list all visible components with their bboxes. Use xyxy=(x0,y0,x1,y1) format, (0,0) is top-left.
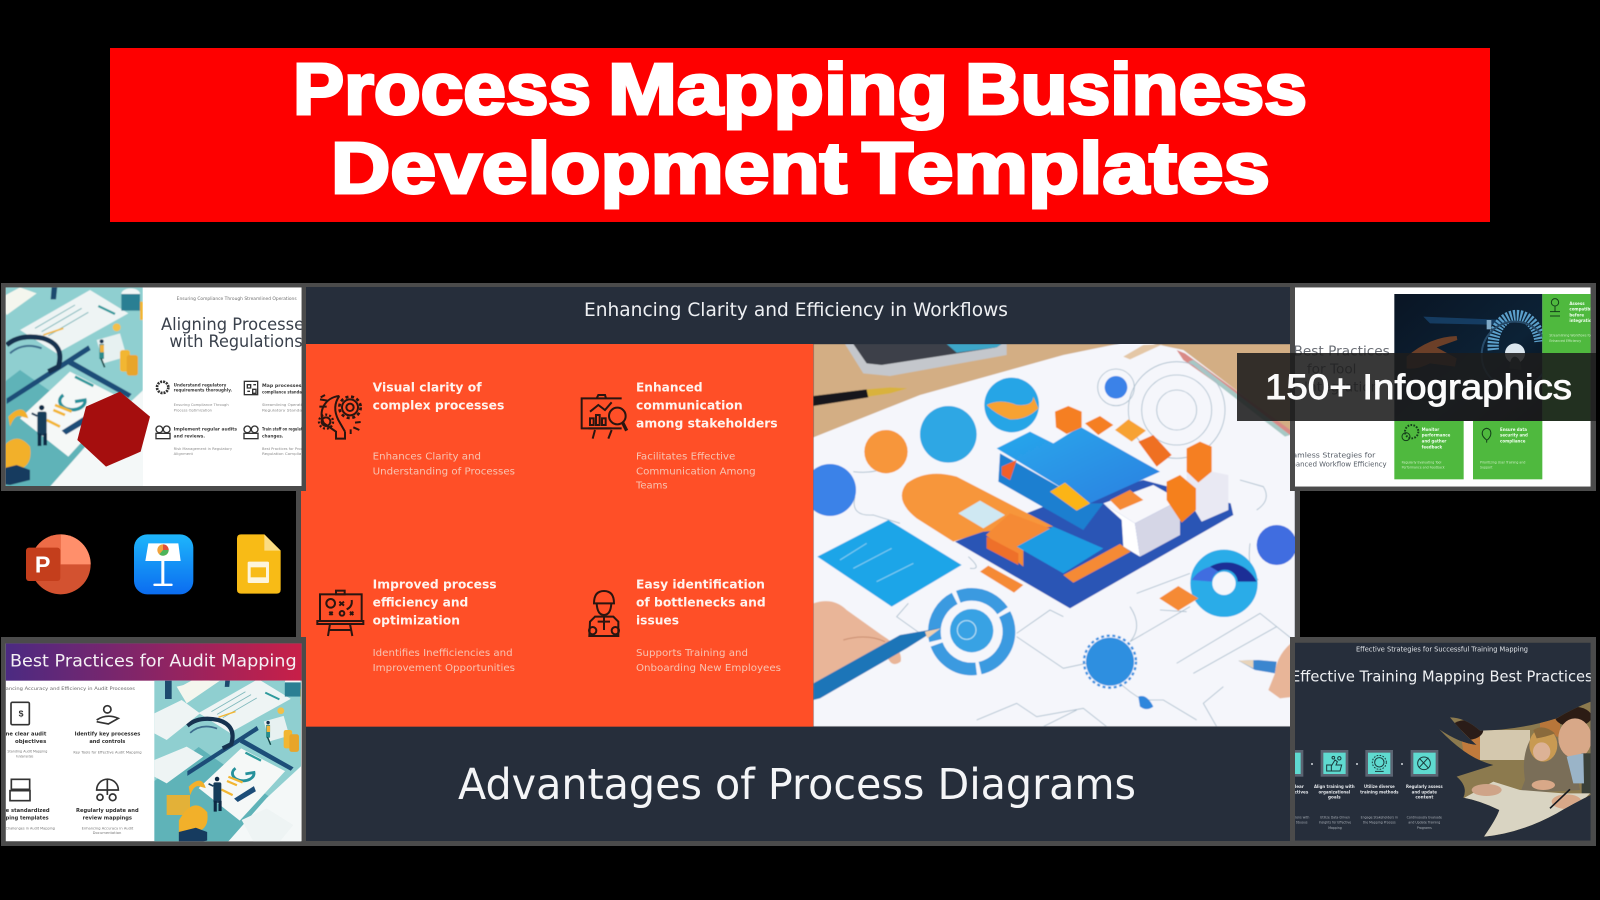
icon: lightbulb with gears xyxy=(319,395,361,439)
thumbnail items: changes. xyxy=(262,433,284,439)
benefit 3: Identifies Inefficiencies and xyxy=(373,648,513,659)
thumbnail green panels: security and xyxy=(1500,433,1528,438)
thumbnail subheading: Seamless Strategies for xyxy=(1283,451,1375,459)
thumbnail items: Train staff on regulatory xyxy=(262,427,309,433)
slide thumbnail: audit mapping: Regularly update and xyxy=(76,808,139,814)
thumbnail heading: Aligning Processes xyxy=(161,315,313,334)
thumbnail items: Process Optimization xyxy=(174,408,212,412)
training steps: Mapping xyxy=(1328,826,1342,830)
slide thumbnail: audit mapping: Key Tools for Effective Audit Mapping xyxy=(73,750,142,754)
slide thumbnail: training mapping xyxy=(1287,637,1596,846)
training steps: Programs xyxy=(1417,826,1432,830)
slide thumbnail: audit mapping xyxy=(1,637,306,846)
training steps: Regularly assess xyxy=(1406,784,1443,789)
training steps: tibuous xyxy=(1296,821,1308,825)
benefit 2: Teams xyxy=(635,480,668,491)
benefit 3: optimization xyxy=(373,613,460,627)
benefit 1 xyxy=(373,381,515,477)
thumbnail items: Risk Management in Regulatory xyxy=(174,447,233,451)
illustration: isometric process diagram xyxy=(804,340,1297,727)
title text line 1: Mapping xyxy=(608,50,948,130)
benefit 4: Onboarding New Employees xyxy=(636,663,781,674)
slide thumbnail: audit mapping: Standing Audit Mapping xyxy=(7,750,47,754)
thumbnail items: Best Practices for Process xyxy=(262,447,309,451)
benefit 2: among stakeholders xyxy=(636,417,778,431)
slide thumbnail: audit mapping: Documentation xyxy=(93,831,121,835)
slide thumbnail: audit mapping: $ xyxy=(19,709,24,719)
thumbnail heading xyxy=(1294,343,1390,395)
thumbnail items: Streamlining Operations xyxy=(262,403,309,407)
thumbnail green panels: and gather xyxy=(1422,438,1446,443)
training steps: Utilize diverse xyxy=(1364,784,1395,789)
title text line 2 xyxy=(331,129,1270,209)
title text line 1: Business xyxy=(965,50,1307,130)
benefit 2: Enhanced xyxy=(636,381,703,395)
slide thumbnail: audit mapping: ping templates xyxy=(6,815,49,821)
benefit 1: Visual clarity of xyxy=(373,381,482,395)
training steps: content xyxy=(1415,795,1433,800)
training steps xyxy=(1287,750,1443,830)
slide thumbnail: audit mapping: Identify key processes xyxy=(75,732,140,738)
slide thumbnail: audit mapping: and controls xyxy=(89,739,125,745)
slide thumbnail: audit mapping: Best Practices for Audit Mapping xyxy=(10,652,297,671)
thumbnail items xyxy=(10,702,118,801)
thumbnail photo: hand and dial xyxy=(1394,294,1548,421)
training steps: the Mapping Process xyxy=(1363,821,1396,825)
thumbnail heading: for Tool xyxy=(1307,361,1356,377)
benefit 4: Easy identification xyxy=(636,577,765,591)
thumbnail heading: with Regulations xyxy=(169,332,303,351)
slide thumbnail: audit mapping: ne clear audit xyxy=(6,732,47,738)
icon: PowerPoint xyxy=(26,534,91,594)
icon: Google Slides xyxy=(237,534,281,594)
training steps: ectives xyxy=(1292,789,1309,794)
benefit 2: Communication Among xyxy=(636,466,756,477)
thumbnail heading: Effective Training Mapping Best Practices xyxy=(1291,669,1593,686)
benefit 2: Facilitates Effective xyxy=(636,451,735,462)
benefit 3 xyxy=(373,577,515,674)
thumbnail kicker: Effective Strategies for Successful Training Mapping xyxy=(1356,646,1528,654)
thumbnail items: compliance standards xyxy=(262,390,309,396)
title banner xyxy=(110,48,1490,222)
slide subtitle: Enhancing Clarity and Efficiency in Workflows xyxy=(584,299,1008,321)
thumbnail green panels: compatibility xyxy=(1569,307,1599,312)
thumbnail subheading xyxy=(1295,452,1386,468)
training steps: Utilize Data-Driven xyxy=(1320,816,1350,820)
thumbnail items: requirements thoroughly. xyxy=(174,388,232,394)
slide thumbnail: compliance regulations xyxy=(1,283,306,491)
slide thumbnail: audit mapping: review mappings xyxy=(83,815,132,821)
training steps: lear xyxy=(1295,784,1305,789)
benefit 1: Understanding of Processes xyxy=(373,466,515,477)
training steps: training methods xyxy=(1360,789,1399,794)
training steps: goals xyxy=(1328,795,1341,800)
training steps: Engage Stakeholders in xyxy=(1361,816,1398,820)
title text line 2: Development xyxy=(331,129,847,209)
thumbnail header xyxy=(6,643,302,681)
training steps: Align training with xyxy=(1314,784,1355,789)
panel: central slide xyxy=(296,283,1300,846)
thumbnail green panels: Streamlining Workflows for xyxy=(1549,334,1593,338)
badge: 150+ Infographics: 150+ Infographics xyxy=(1265,368,1572,407)
thumbnail green panels: performance xyxy=(1422,433,1451,438)
benefit 2 xyxy=(635,381,778,491)
slide thumbnail: audit mapping: objectives xyxy=(15,739,46,745)
red hexagon xyxy=(77,392,150,467)
thumbnail green panels: Performance and Feedback xyxy=(1402,466,1445,470)
thumbnail photo: students over a map xyxy=(1437,697,1593,840)
orange benefits panel xyxy=(301,344,813,727)
benefit 3: efficiency and xyxy=(373,595,468,609)
slide thumbnail: tool integration xyxy=(1283,283,1599,491)
thumbnail items: Map processes to xyxy=(262,383,309,389)
training steps: organizational xyxy=(1318,789,1351,794)
thumbnail heading xyxy=(161,317,302,350)
thumbnail kicker: ancing Accuracy and Efficiency in Audit Processes xyxy=(6,686,136,692)
title text line 1: Process xyxy=(293,50,591,130)
badge: 150+ Infographics xyxy=(1237,353,1596,421)
slide thumbnail: audit mapping: Challenges in Audit Mapping xyxy=(6,827,55,831)
thumbnail image: isometric documents xyxy=(154,680,301,842)
slide thumbnail: audit mapping: Enhancing Accuracy in Audit xyxy=(82,826,134,830)
benefit 4: of bottlenecks and xyxy=(636,595,766,609)
benefit 4: Supports Training and xyxy=(636,648,748,659)
benefit 2: communication xyxy=(636,399,743,413)
benefit 3: Improvement Opportunities xyxy=(373,663,515,674)
title text line 1 xyxy=(293,50,1307,130)
icon: Keynote xyxy=(134,534,193,594)
thumbnail green panels: before xyxy=(1569,312,1584,317)
title text line 2: Templates xyxy=(862,129,1270,209)
thumbnail green panels: Support xyxy=(1480,466,1493,470)
thumbnail items: Ensuring Compliance Through xyxy=(174,403,229,407)
software logos xyxy=(26,534,281,594)
training steps: tions with xyxy=(1294,816,1309,820)
training steps: Continuously Evaluate xyxy=(1407,816,1442,820)
thumbnail items: Implement regular audits xyxy=(174,427,237,433)
training steps: and Update Training xyxy=(1408,821,1440,825)
thumbnail green panels: Ensure data xyxy=(1500,427,1527,432)
training steps: Insights for Effective xyxy=(1319,821,1351,825)
thumbnail image: isometric documents xyxy=(6,288,143,486)
benefit 3: Improved process xyxy=(373,577,497,591)
training steps: and update xyxy=(1412,789,1437,794)
thumbnail items xyxy=(156,381,309,456)
benefit 4: issues xyxy=(636,613,679,627)
thumbnail heading: Integration xyxy=(1304,379,1379,395)
thumbnail items: and reviews. xyxy=(174,433,205,439)
benefit 1: complex processes xyxy=(373,399,504,413)
thumbnail green panels: Monitor xyxy=(1422,427,1439,432)
thumbnail green panels: Regularly Evaluating Tool xyxy=(1402,460,1442,464)
thumbnail green panels: Prioritizing User Training and xyxy=(1480,460,1525,464)
thumbnail green panels xyxy=(1394,294,1599,479)
thumbnail kicker: Ensuring Compliance Through Streamlined Operations xyxy=(177,296,297,302)
thumbnail items: Regulatory Standards xyxy=(262,408,309,412)
slide title: Advantages of Process Diagrams xyxy=(458,761,1136,810)
thumbnail subheading: Enhanced Workflow Efficiency xyxy=(1283,461,1387,469)
icon: presentation board with magnifier xyxy=(582,395,627,439)
icon: worker with helmet xyxy=(589,591,619,636)
thumbnail green panels: Assess xyxy=(1569,301,1585,306)
thumbnail green panels: Enhanced Efficiency xyxy=(1549,339,1581,343)
slide thumbnail: audit mapping: Fundamentals xyxy=(16,754,33,758)
icon: PowerPoint: P xyxy=(35,552,50,578)
thumbnail items: Understand regulatory xyxy=(174,382,226,388)
icon: strategy easel xyxy=(317,591,363,636)
thumbnail items: Alignment xyxy=(174,452,194,456)
benefit 1: Enhances Clarity and xyxy=(373,451,481,462)
benefit 4 xyxy=(636,577,781,674)
thumbnail items: Regulation Compliance xyxy=(262,452,309,456)
thumbnail green panels: compliance xyxy=(1500,438,1526,443)
thumbnail green panels: feedback xyxy=(1422,444,1443,449)
slide thumbnail: audit mapping: e standardized xyxy=(6,808,50,814)
thumbnail green panels: integration xyxy=(1569,318,1595,323)
thumbnail heading: Best Practices xyxy=(1294,343,1390,359)
